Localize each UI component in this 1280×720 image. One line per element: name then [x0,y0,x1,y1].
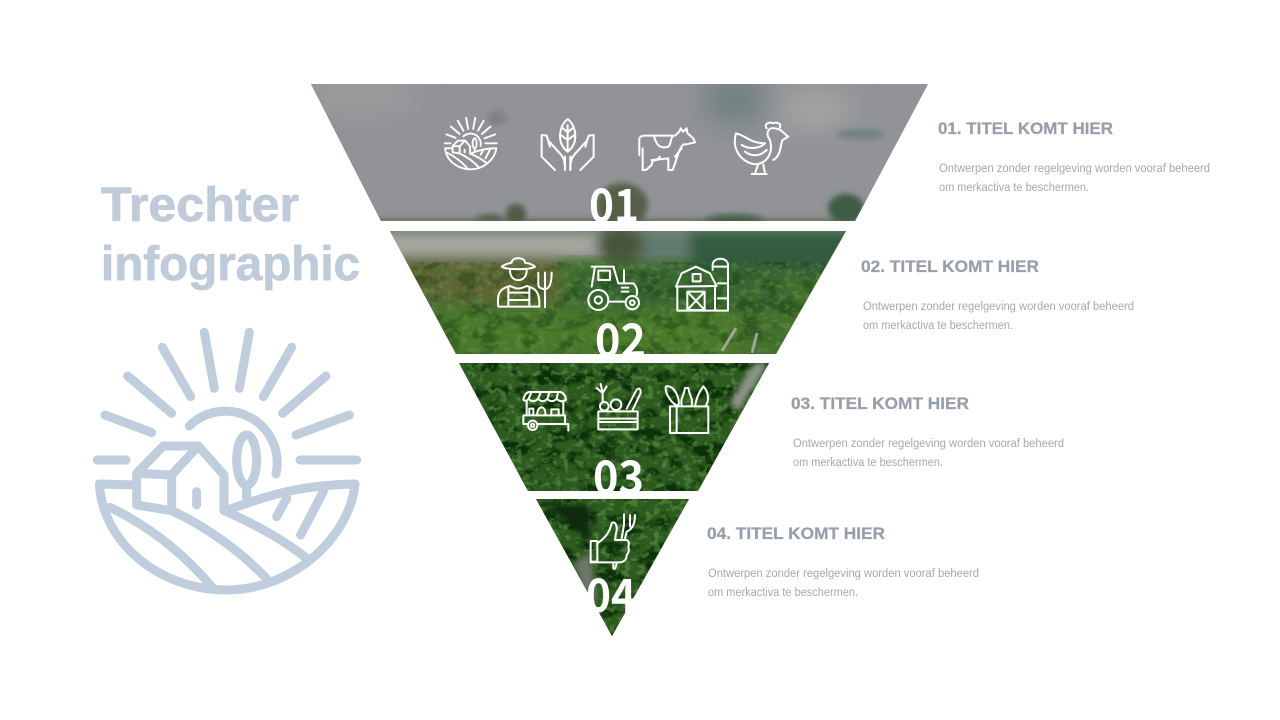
text block 01: Ontwerpen zonder regelgeving worden vooraf beheerd [939,163,1210,175]
text block 01: om merkactiva te beschermen. [939,182,1089,194]
numbers: 03 [593,442,644,508]
icon: farmer [498,258,552,307]
funnel photo segments [300,74,940,640]
numbers: 04 [586,560,636,626]
icon: thumbs up with fork [591,514,635,569]
text block 03: Ontwerpen zonder regelgeving worden vooraf beheerd [793,438,1064,450]
text block 01 [938,119,1210,194]
dark foliage [450,360,780,640]
icon: hands with leaf [542,119,594,170]
tree line [370,183,870,227]
text block 01: 01. TITEL KOMT HIER [938,119,1113,138]
numbers: 01 [589,170,639,236]
title: infographic [101,238,360,291]
text block 03: 03. TITEL KOMT HIER [791,394,969,413]
icon: farm [445,118,497,169]
icon row 3: stall, crate, bag [523,384,708,433]
icon: grocery bag [666,386,708,433]
icon row 1: hands, cow, chicken [542,119,788,174]
middle band [380,229,860,357]
icon: market stall [523,392,568,431]
title [101,179,360,291]
title: Trechter [101,179,299,232]
icon: cow [639,128,695,170]
text block 02: 02. TITEL KOMT HIER [861,257,1039,276]
text block 04 [707,524,979,599]
text block 02: Ontwerpen zonder regelgeving worden vooraf beheerd [863,301,1134,313]
icon: chicken [735,123,788,174]
text block 04: 04. TITEL KOMT HIER [707,524,885,543]
text block 02: om merkactiva te beschermen. [863,320,1013,332]
numbers: 02 [595,305,646,371]
text block 03: om merkactiva te beschermen. [793,457,943,469]
text block 04: Ontwerpen zonder regelgeving worden vooraf beheerd [708,568,979,580]
icon: tractor [588,267,639,310]
text block 02 [861,257,1134,332]
numbers [586,170,646,626]
text block 04: om merkactiva te beschermen. [708,587,858,599]
text block 03 [791,394,1064,469]
icon: large farm logo [97,332,357,590]
icon: barn [676,259,728,311]
icon: vegetable crate [597,384,641,429]
icon row 2: farmer, tractor, barn [498,258,728,311]
